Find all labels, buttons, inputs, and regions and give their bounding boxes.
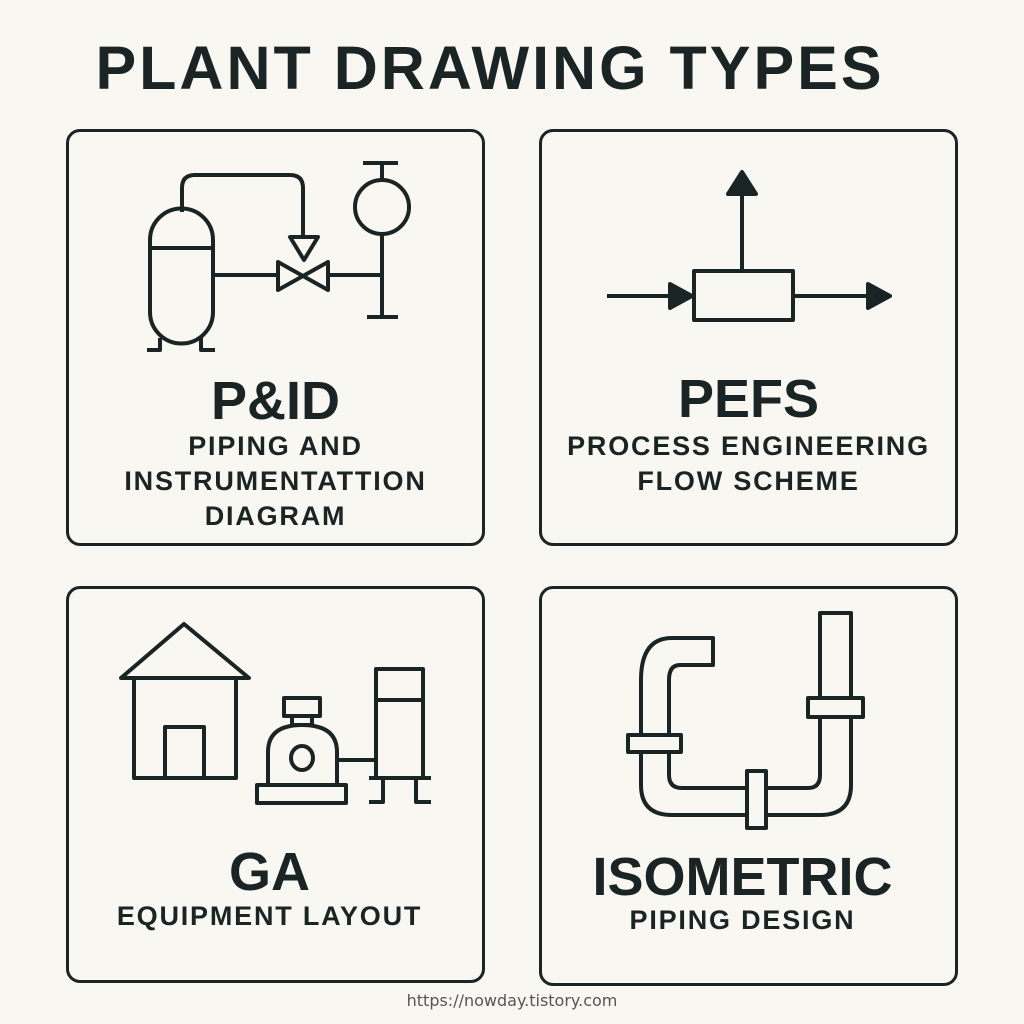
url footer: https://nowday.tistory.com [407, 991, 617, 1010]
icon: PEFS flow [607, 172, 890, 320]
icon: GA equipment [121, 624, 431, 803]
panel: P&ID [66, 129, 485, 546]
P&ID subtitle: PIPING AND [188, 431, 363, 461]
panel: PEFS [539, 129, 958, 546]
PEFS subtitle [567, 431, 930, 496]
icon: P&ID diagram [147, 163, 409, 350]
GA subtitle: EQUIPMENT LAYOUT [117, 901, 422, 931]
PEFS heading: PEFS [678, 369, 819, 429]
P&ID subtitle [124, 431, 427, 531]
panel: Isometric [539, 586, 958, 986]
P&ID subtitle: DIAGRAM [205, 501, 346, 531]
P&ID heading: P&ID [211, 371, 340, 431]
GA heading: GA [229, 842, 310, 902]
PEFS subtitle: PROCESS ENGINEERING [567, 431, 930, 461]
P&ID subtitle: INSTRUMENTATTION [124, 466, 427, 496]
title: PLANT DRAWING TYPES [95, 34, 885, 102]
panel: GA [66, 586, 485, 983]
icon: isometric piping [628, 613, 863, 828]
Isometric heading: ISOMETRIC [592, 847, 892, 907]
PEFS subtitle: FLOW SCHEME [637, 466, 860, 496]
Isometric subtitle: PIPING DESIGN [630, 905, 855, 935]
